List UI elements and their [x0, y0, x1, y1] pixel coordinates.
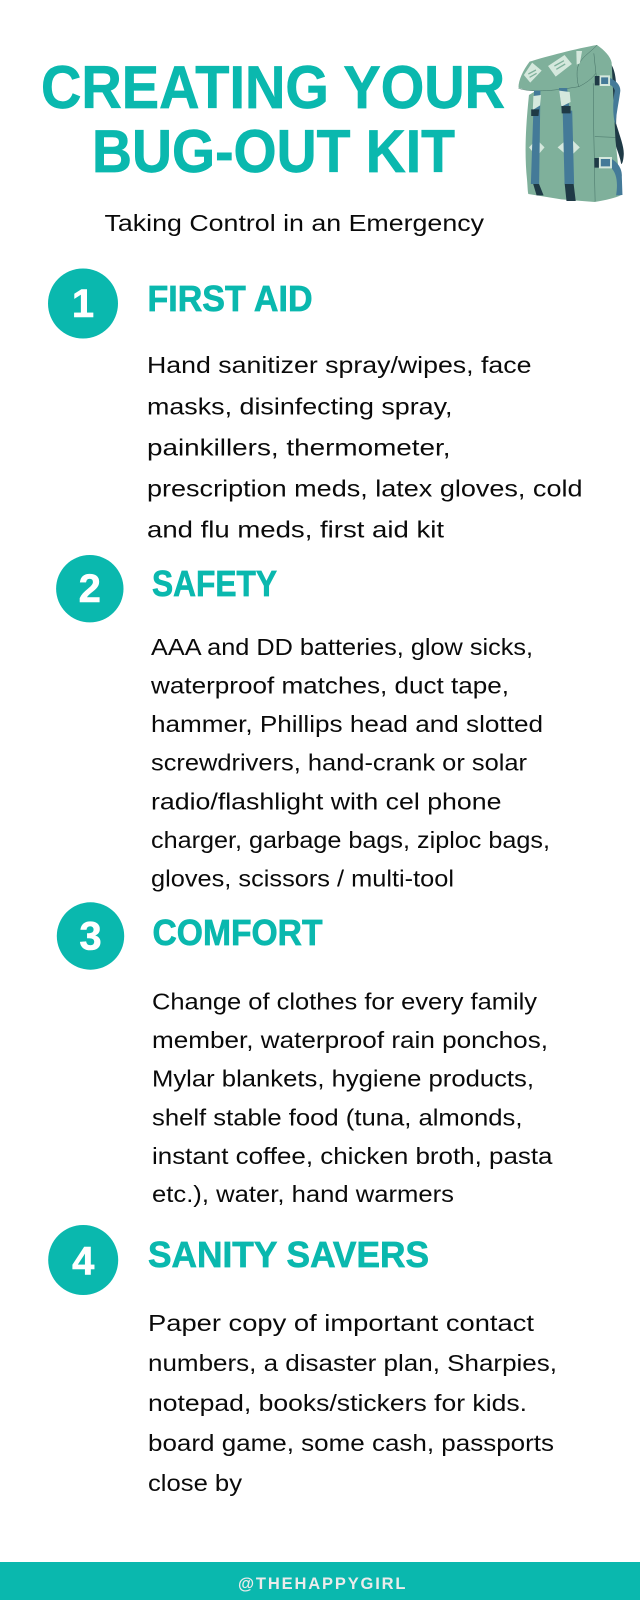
panel: comfort	[57, 902, 553, 1207]
text block: safety items: radio/flashlight with cel phone	[151, 788, 502, 814]
text block: first aid items: masks, disinfecting spray,	[147, 394, 452, 420]
text block: safety items: AAA and DD batteries, glow sicks,	[151, 634, 533, 660]
number badge 1	[48, 268, 118, 338]
heading: comfort: COMFORT	[152, 912, 323, 953]
title: CREATING YOUR	[41, 54, 505, 121]
number badge 3	[57, 902, 124, 970]
number badge 4: 4	[72, 1240, 95, 1284]
heading: first aid: FIRST AID	[148, 278, 312, 319]
text block: first aid items: and flu meds, first aid kit	[147, 516, 445, 542]
text block: sanity savers items	[148, 1310, 557, 1496]
number badge 3: 3	[79, 914, 102, 958]
text block: safety items	[150, 634, 550, 892]
number badge 2	[56, 555, 123, 622]
text block: first aid items: prescription meds, latex gloves, cold	[147, 476, 582, 502]
text block: sanity savers items: board game, some cash, passports	[148, 1430, 554, 1456]
text block: first aid items: Hand sanitizer spray/wipes, face	[147, 352, 532, 378]
text block: sanity savers items: notepad, books/stickers for kids.	[148, 1390, 527, 1416]
text block: first aid items	[147, 352, 582, 542]
icon: backpack	[518, 45, 624, 202]
title	[41, 54, 505, 185]
number badge 4	[48, 1225, 118, 1295]
text block: comfort items	[152, 988, 553, 1207]
text block: comfort items: etc.), water, hand warmers	[152, 1181, 454, 1207]
text block: sanity savers items: numbers, a disaster plan, Sharpies,	[148, 1350, 557, 1376]
heading: safety: SAFETY	[152, 563, 277, 604]
number badge 2: 2	[79, 567, 101, 611]
text block: safety items: gloves, scissors / multi-tool	[151, 866, 454, 892]
text block: sanity savers items: close by	[148, 1470, 243, 1496]
text block: safety items: screwdrivers, hand-crank or solar	[151, 750, 527, 776]
subtitle: Taking Control in an Emergency	[104, 210, 484, 236]
text block: safety items: waterproof matches, duct tape,	[150, 672, 509, 698]
text block: comfort items: shelf stable food (tuna, almonds,	[152, 1104, 522, 1130]
text block: comfort items: instant coffee, chicken broth, pasta	[152, 1143, 553, 1169]
footer handle: @THEHAPPYGIRL	[238, 1575, 406, 1593]
text block: comfort items: member, waterproof rain ponchos,	[152, 1027, 548, 1053]
heading: sanity savers: SANITY SAVERS	[148, 1234, 429, 1275]
panel: first aid	[48, 268, 582, 542]
panel: safety	[56, 555, 550, 892]
text block: comfort items: Mylar blankets, hygiene products,	[152, 1066, 534, 1092]
text block: first aid items: painkillers, thermometer,	[147, 434, 450, 460]
title: BUG-OUT KIT	[92, 118, 455, 185]
panel: sanity savers	[48, 1225, 557, 1496]
text block: safety items: hammer, Phillips head and slotted	[151, 711, 543, 737]
text block: comfort items: Change of clothes for every family	[152, 988, 538, 1014]
footer bar	[0, 1562, 640, 1600]
number badge 1: 1	[72, 282, 94, 326]
text block: safety items: charger, garbage bags, ziploc bags,	[151, 827, 550, 853]
text block: sanity savers items: Paper copy of important contact	[148, 1310, 535, 1336]
